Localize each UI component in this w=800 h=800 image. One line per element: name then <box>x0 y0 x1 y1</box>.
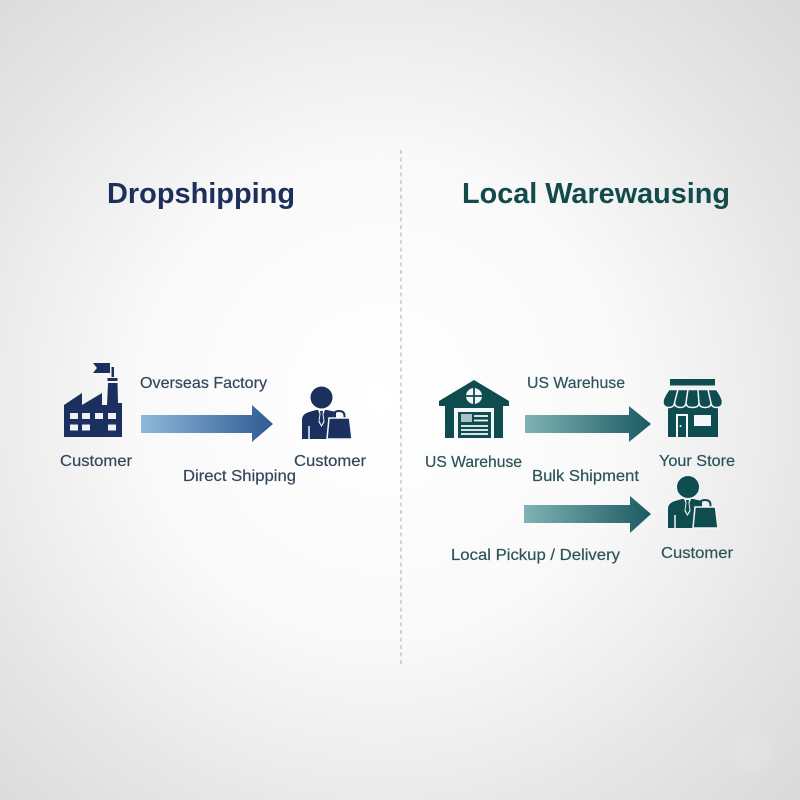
label: US Warehuse: US Warehuse <box>425 454 522 471</box>
heading: Local Warewausing: Local Warewausing <box>462 178 730 210</box>
arrow: local pickup and delivery <box>524 496 651 533</box>
panel: local warehousing <box>425 178 735 564</box>
icon: customer with shopping bag <box>668 476 718 528</box>
label: Bulk Shipment: Bulk Shipment <box>532 468 640 485</box>
label: Overseas Factory: Overseas Factory <box>140 375 267 392</box>
panel: dropshipping <box>60 178 367 485</box>
arrow: bulk shipment <box>525 406 651 442</box>
label: destination customer: Customer <box>294 453 367 470</box>
icon: store <box>663 379 722 437</box>
icon: US warehouse <box>439 380 509 438</box>
icon: factory <box>64 363 122 437</box>
icon: customer with shopping bag <box>302 386 352 439</box>
label: local customer: Customer <box>661 545 734 562</box>
heading: Dropshipping: Dropshipping <box>107 178 295 210</box>
label: Your Store: Your Store <box>659 453 735 470</box>
label: Local Pickup / Delivery: Local Pickup / Delivery <box>451 547 620 564</box>
label: top US Warehuse: US Warehuse <box>527 375 625 392</box>
label: Direct Shipping: Direct Shipping <box>183 468 296 485</box>
arrow: direct shipping <box>141 405 273 442</box>
label: factory customer: Customer <box>60 453 133 470</box>
